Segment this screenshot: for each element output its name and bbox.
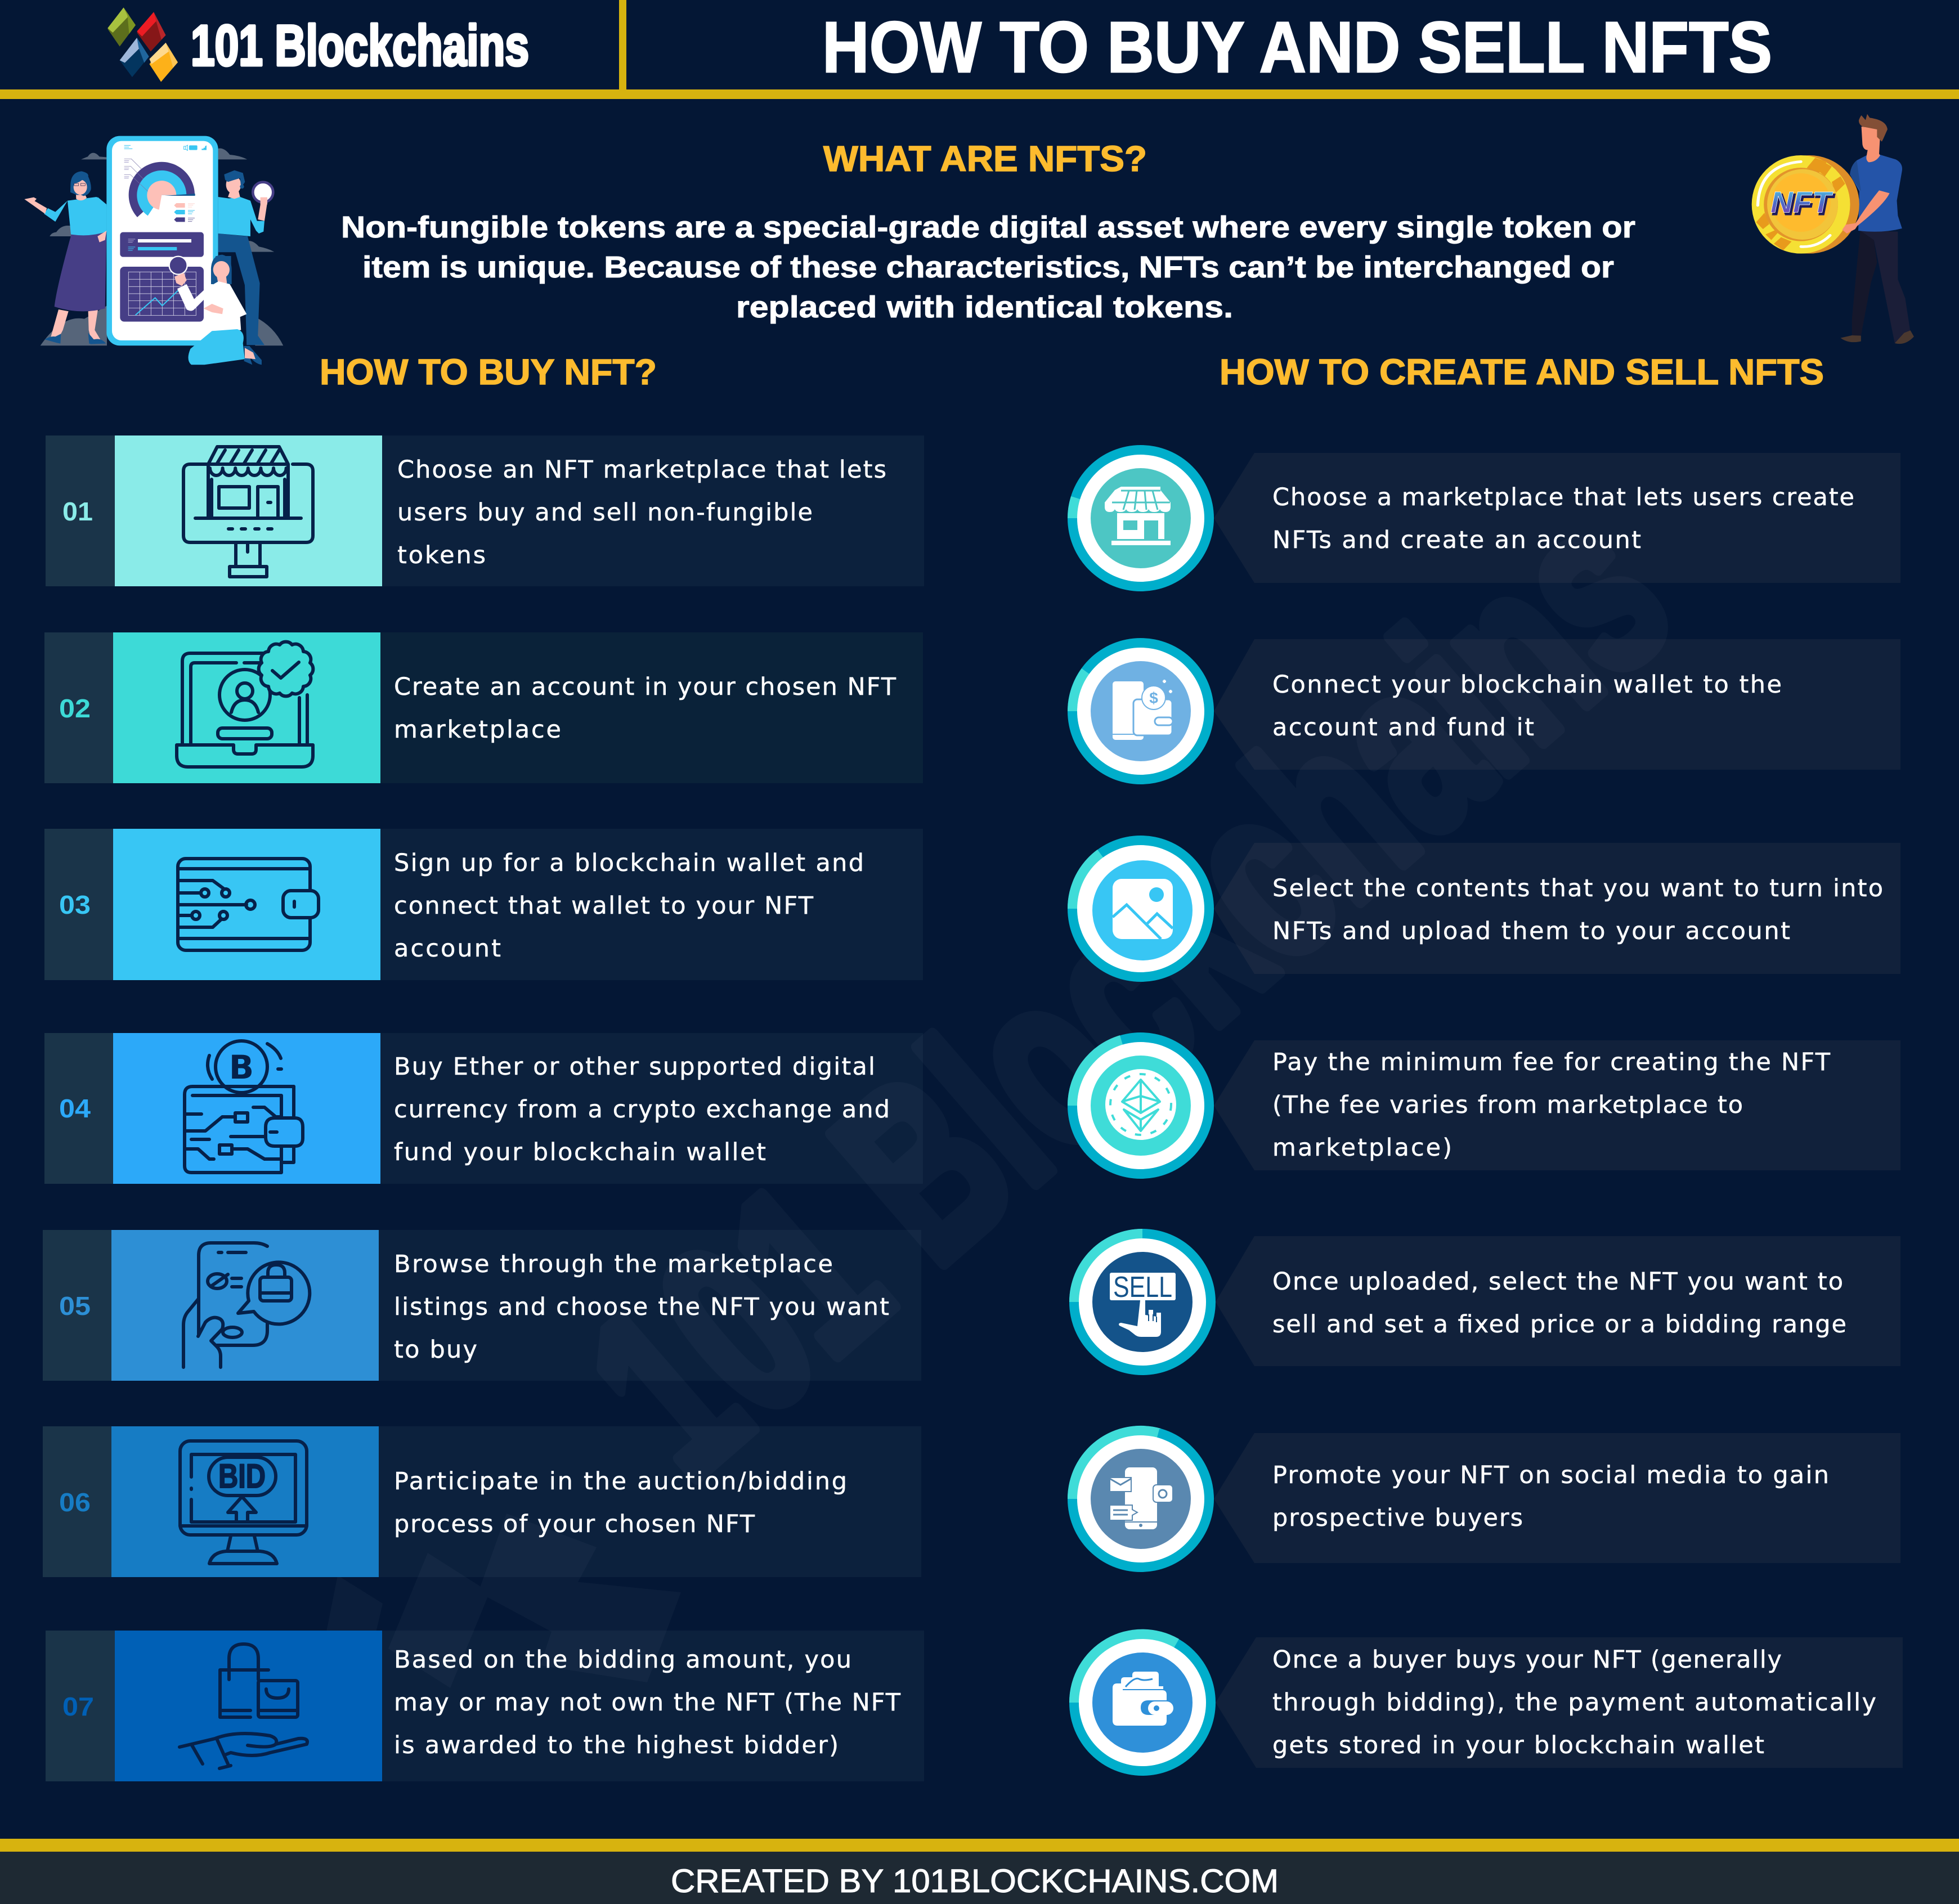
intro text block: [341, 210, 1635, 324]
step 04 text: fund your blockchain wallet: [394, 1138, 766, 1166]
step 05 text: listings and choose the NFT you want: [394, 1293, 889, 1321]
icon: bitcoin wallet: [185, 1041, 303, 1173]
step 07 text: Based on the bidding amount, you: [394, 1646, 851, 1674]
sell step 5 text: sell and set a fixed price or a bidding range: [1272, 1310, 1846, 1339]
icon: bitcoin wallet: B: [229, 1048, 254, 1086]
icon: storefront on monitor: [183, 447, 313, 577]
sell step 6 text: Promote your NFT on social media to gain: [1272, 1461, 1829, 1489]
sell step 1 text: [1272, 483, 1854, 554]
number 07: 07: [62, 1692, 94, 1721]
number 03: 03: [59, 890, 91, 919]
icon: image upload: [1113, 879, 1173, 939]
sell step 2 text: account and fund it: [1272, 713, 1534, 742]
sell step 7 text: Once a buyer buys your NFT (generally: [1272, 1646, 1782, 1674]
step 01 text: Choose an NFT marketplace that lets: [397, 456, 886, 484]
heading: how to buy: HOW TO BUY NFT?: [320, 352, 657, 392]
icon: sell button with pointer: [1110, 1271, 1176, 1337]
number 01: 01: [62, 497, 93, 526]
step 05 text: [394, 1250, 889, 1364]
coin: [1752, 155, 1859, 254]
circle badge 3: [1068, 836, 1214, 982]
kneeling person: [169, 255, 262, 365]
step 03 text: Sign up for a blockchain wallet and: [394, 849, 864, 877]
sell step 2: [1068, 638, 1782, 784]
step 03 text: connect that wallet to your NFT: [394, 892, 814, 920]
step 02: [44, 632, 896, 783]
icon: laptop profile with check badge: [177, 642, 313, 767]
sell step 1 text: NFTs and create an account: [1272, 526, 1641, 554]
step 07 text: [394, 1646, 901, 1759]
circle badge 1: [1068, 445, 1214, 591]
sell step 3 text: Select the contents that you want to turn into: [1272, 874, 1883, 902]
step 06: [43, 1426, 847, 1577]
step 01 text: tokens: [397, 541, 486, 569]
sell step 4 text: Pay the minimum fee for creating the NFT: [1272, 1048, 1831, 1076]
circle badge 4: [1068, 1032, 1214, 1179]
sell step 6 text: [1272, 1461, 1829, 1532]
circle badge 5: [1069, 1229, 1216, 1375]
circle badge 6: [1068, 1426, 1214, 1572]
step 07: [46, 1631, 901, 1781]
sell step 4 text: (The fee varies from marketplace to: [1272, 1091, 1743, 1119]
panels: step text backgrounds, left column: [379, 435, 924, 1781]
watermark: [321, 453, 1716, 1699]
NFT coin label: NFT: [1772, 188, 1835, 221]
number 02: 02: [59, 694, 91, 723]
step 04 text: [394, 1053, 890, 1166]
sell step 2 text: [1272, 671, 1782, 742]
step 06 text: process of your chosen NFT: [394, 1510, 755, 1538]
icon: store: [1105, 487, 1171, 545]
sell step 1 text: Choose a marketplace that lets users create: [1272, 483, 1854, 511]
sell step 6: [1068, 1426, 1829, 1572]
header bar: [0, 0, 1959, 99]
NFT coin label: NFT: [1770, 186, 1833, 219]
sell step 4 text: marketplace): [1272, 1134, 1452, 1162]
icon: phone and wallet with coin: [1113, 680, 1173, 740]
sell step 5 text: Once uploaded, select the NFT you want to: [1272, 1268, 1843, 1296]
circle badge 7: [1069, 1629, 1216, 1776]
sell step 7 text: through bidding), the payment automatically: [1272, 1689, 1876, 1717]
sell step 4 text: [1272, 1048, 1831, 1162]
step 01: [46, 435, 886, 586]
step 06 text: [394, 1467, 847, 1538]
icon: phone with social media: [1110, 1467, 1173, 1529]
sell step 3: [1068, 836, 1883, 982]
step 03 text: account: [394, 935, 501, 963]
icon: bid on monitor: [180, 1441, 307, 1564]
icon: sell button with pointer: SELL: [1113, 1271, 1172, 1304]
sell step 5 text: [1272, 1268, 1846, 1339]
sell step 7: [1069, 1629, 1876, 1776]
icon: hand holding shopping bags: [180, 1644, 307, 1768]
intro text block: Non-fungible tokens are a special-grade digital asset where every single token or: [341, 210, 1635, 244]
step 05 text: to buy: [394, 1336, 477, 1364]
step 05 text: Browse through the marketplace: [394, 1250, 833, 1278]
footer credit: CREATED BY 101BLOCKCHAINS.COM: [671, 1863, 1279, 1899]
footer: [0, 1839, 1959, 1904]
illustration: man holding NFT coin: [1752, 114, 1914, 344]
icon: ethereum diamond: [1105, 1069, 1176, 1140]
logo wordmark: 101 Blockchains: [191, 14, 529, 78]
heading: what are NFTs: WHAT ARE NFTS?: [823, 138, 1147, 179]
icon: wallet with cash: [1113, 1672, 1173, 1726]
step 02 text: marketplace: [394, 716, 561, 744]
icon: hand holding phone with shopping bubble: [183, 1243, 310, 1367]
step 07 text: may or may not own the NFT (The NFT: [394, 1689, 901, 1717]
step 04 text: Buy Ether or other supported digital: [394, 1053, 875, 1081]
sell step 3 text: NFTs and upload them to your account: [1272, 917, 1790, 945]
man body: [1840, 114, 1914, 344]
number 05: 05: [59, 1291, 91, 1321]
sell step 5: [1069, 1229, 1846, 1375]
step 02 text: [394, 673, 896, 744]
circle badge 2: [1068, 638, 1214, 784]
step 01 text: [397, 456, 886, 569]
sell step 4: [1068, 1032, 1831, 1179]
sell step 2 text: Connect your blockchain wallet to the: [1272, 671, 1782, 699]
title: HOW TO BUY AND SELL NFTS: [822, 7, 1772, 88]
woman figure: [24, 171, 106, 344]
step 02 text: Create an account in your chosen NFT: [394, 673, 896, 701]
man figure: [218, 170, 273, 345]
intro text block: item is unique. Because of these characteristics, NFTs can’t be interchanged or: [362, 250, 1614, 284]
step 03 text: [394, 849, 864, 963]
logo icon: four cubes: [107, 7, 178, 82]
icon: phone and wallet with coin: $: [1149, 689, 1158, 707]
sell step 3 text: [1272, 874, 1883, 945]
sell step 7 text: [1272, 1646, 1876, 1759]
step 06 text: Participate in the auction/bidding: [394, 1467, 847, 1496]
heading: how to create and sell: HOW TO CREATE AND SELL NFTS: [1220, 352, 1824, 392]
step 05: [43, 1230, 889, 1381]
step 07 text: is awarded to the highest bidder): [394, 1731, 839, 1759]
icon: crypto wallet: [178, 859, 319, 950]
step 03: [44, 829, 864, 980]
sell step 7 text: gets stored in your blockchain wallet: [1272, 1731, 1764, 1759]
number 04: 04: [59, 1094, 91, 1123]
step 04 text: currency from a crypto exchange and: [394, 1095, 890, 1124]
step 01 text: users buy and sell non-fungible: [397, 499, 813, 527]
step 04: [44, 1033, 890, 1184]
sell step 6 text: prospective buyers: [1272, 1504, 1523, 1532]
number 06: 06: [59, 1488, 91, 1517]
panels: step text backgrounds, right column: [1214, 453, 1903, 1768]
intro text block: replaced with identical tokens.: [736, 290, 1233, 324]
icon: bid on monitor: BID: [218, 1457, 266, 1495]
illustration: people with phone dashboard: [24, 136, 283, 365]
sell step 1: [1068, 445, 1854, 591]
